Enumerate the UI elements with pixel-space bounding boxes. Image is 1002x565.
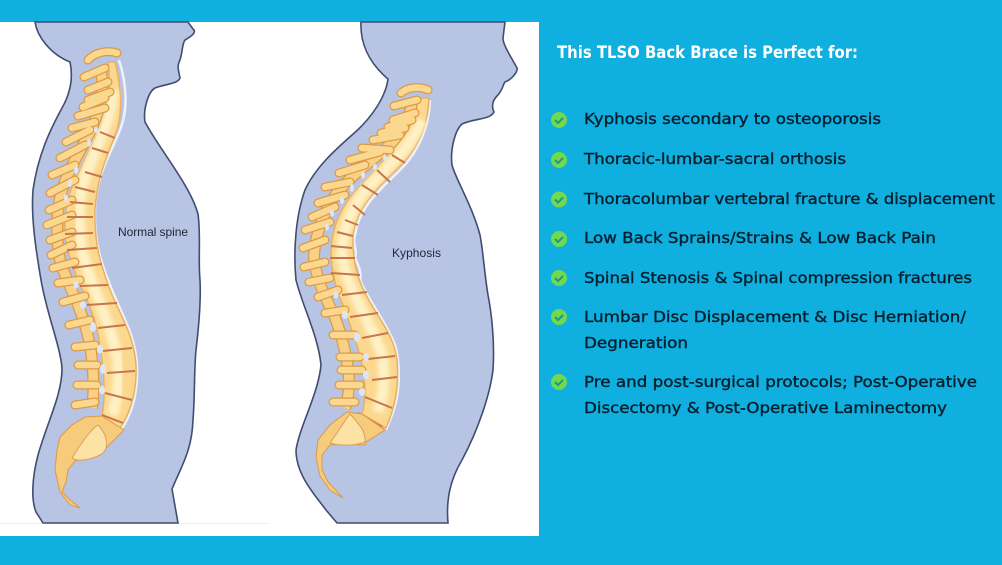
sacrum and coccyx: kyphosis (316, 412, 385, 498)
white front ligament: kyphosis (354, 100, 430, 430)
figure: kyphosis spine (295, 22, 517, 523)
spinous processes: kyphosis (303, 88, 428, 402)
foramina: normal (64, 127, 106, 394)
laminae: normal (57, 72, 102, 408)
list item 2: Thoracic-lumbar-sacral orthosis (583, 150, 846, 168)
white front ligament: normal (95, 60, 137, 434)
list item 7 (551, 373, 977, 417)
list item 1: Kyphosis secondary to osteoporosis (584, 110, 881, 128)
column highlight: kyphosis (342, 120, 422, 412)
figure: normal spine (32, 22, 200, 523)
list item 4: Low Back Sprains/Strains & Low Back Pain (584, 229, 936, 247)
sacrum and coccyx: normal (55, 416, 124, 508)
list item 7: Discectomy & Post-Operative Laminectomy (584, 399, 947, 417)
discs: normal (65, 132, 135, 423)
label: normal spine: Normal spine (118, 225, 188, 239)
panel: spine illustrations (0, 22, 539, 536)
list item 6: Lumbar Disc Displacement & Disc Herniation/ (584, 308, 967, 326)
discs: kyphosis (330, 155, 405, 427)
list item 3: Thoracolumbar vertebral fracture & displacement (583, 190, 995, 208)
panel: benefits list (551, 43, 995, 417)
vertebral column: normal (65, 62, 136, 428)
vertebral column: kyphosis (331, 98, 429, 428)
spinous processes: normal (47, 52, 117, 405)
list item 7: Pre and post-surgical protocols; Post-Operative (584, 373, 977, 391)
laminae: kyphosis (314, 102, 412, 408)
foramina: kyphosis (325, 155, 387, 396)
body silhouette: normal (32, 22, 200, 523)
list item 6 (551, 308, 967, 352)
list item 6: Degneration (584, 334, 688, 352)
sacral plate: kyphosis (330, 414, 365, 445)
body silhouette: kyphosis (295, 22, 517, 523)
heading: This TLSO Back Brace is Perfect for: (557, 43, 858, 63)
sacral plate: normal (72, 425, 107, 460)
column highlight: normal (80, 90, 119, 415)
label: kyphosis: Kyphosis (392, 246, 441, 260)
list item 5: Spinal Stenosis & Spinal compression fractures (584, 269, 972, 287)
